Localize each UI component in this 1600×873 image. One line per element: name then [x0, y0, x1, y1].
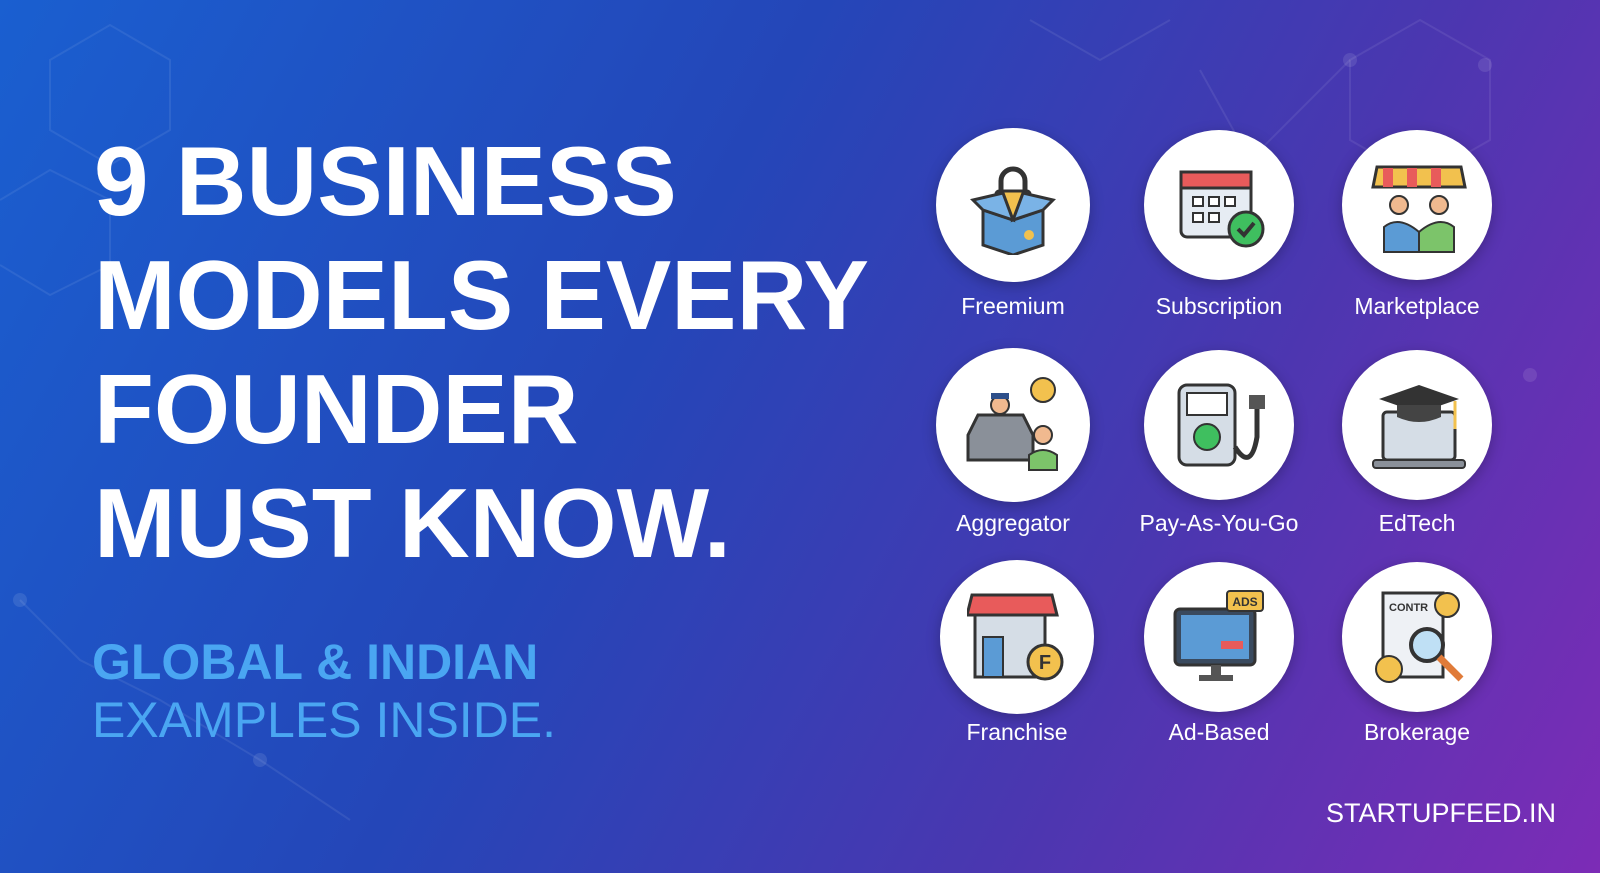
title: [94, 126, 869, 578]
label: freemium: Freemium: [961, 293, 1065, 319]
subtitle: [92, 634, 556, 748]
icon: edtech: [1342, 350, 1492, 500]
icon: aggregator: [936, 348, 1090, 502]
icon: marketplace: [1342, 130, 1492, 280]
icon: ad-based: ADS: [1232, 595, 1258, 609]
label: pay-as-you-go: Pay-As-You-Go: [1140, 510, 1298, 536]
icon: franchise: [940, 560, 1094, 714]
icon: freemium: [936, 128, 1090, 282]
icon: brokerage: CONTR: [1389, 602, 1428, 614]
title: MODELS EVERY: [94, 240, 869, 350]
title: FOUNDER: [94, 354, 579, 464]
title: 9 BUSINESS: [94, 126, 677, 236]
icon: ad-based: [1144, 562, 1294, 712]
icon: pay-as-you-go: [1144, 350, 1294, 500]
icon grid: [930, 126, 1498, 745]
icon: brokerage: [1342, 562, 1492, 712]
icon: subscription: [1144, 130, 1294, 280]
title: MUST KNOW.: [94, 468, 731, 578]
label: marketplace: Marketplace: [1354, 293, 1480, 319]
label: ad-based: Ad-Based: [1168, 719, 1270, 745]
subtitle: GLOBAL & INDIAN: [92, 634, 538, 690]
label: franchise: Franchise: [966, 719, 1067, 745]
icon: franchise: F: [1039, 652, 1051, 674]
brand footer: STARTUPFEED.IN: [1326, 798, 1556, 828]
label: aggregator: Aggregator: [956, 510, 1070, 536]
subtitle: EXAMPLES INSIDE.: [92, 692, 556, 748]
label: brokerage: Brokerage: [1364, 719, 1470, 745]
label: edtech: EdTech: [1379, 510, 1455, 536]
label: subscription: Subscription: [1156, 293, 1282, 319]
